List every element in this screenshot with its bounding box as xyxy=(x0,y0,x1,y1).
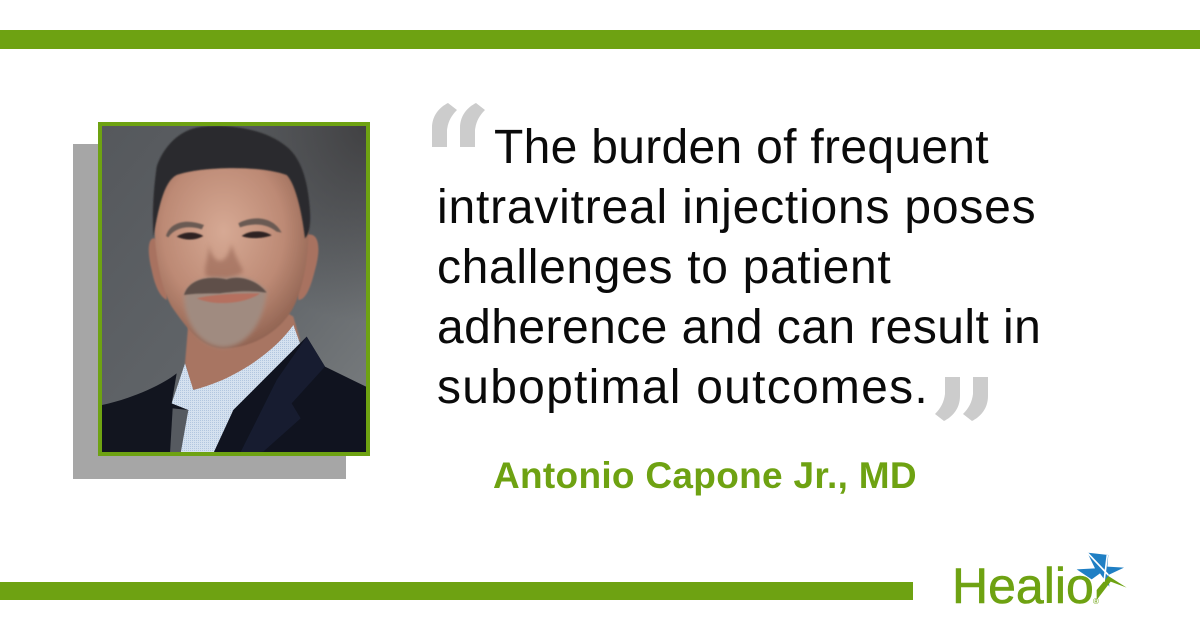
shirt xyxy=(172,325,300,453)
moustache and goatee xyxy=(184,277,267,347)
quote text: challenges to patient xyxy=(437,241,891,294)
portrait photo with green frame xyxy=(98,122,370,456)
closing quotation mark xyxy=(935,377,988,421)
ears xyxy=(149,238,170,300)
quote text: The burden of frequent xyxy=(494,121,989,174)
lips xyxy=(197,293,260,303)
eyebrows xyxy=(166,222,204,237)
bottom green bar xyxy=(0,582,913,600)
top green bar xyxy=(0,30,1200,49)
lapel highlight xyxy=(240,337,325,453)
eyes xyxy=(177,232,203,240)
Healio logo: ® xyxy=(1093,597,1099,606)
neck xyxy=(185,297,300,390)
opening quotation mark xyxy=(432,103,485,147)
hair xyxy=(153,126,310,238)
jacket right xyxy=(213,337,366,453)
face xyxy=(154,160,308,348)
jacket left xyxy=(102,373,188,453)
studio background xyxy=(102,126,366,453)
quote text: suboptimal outcomes. xyxy=(437,361,929,414)
quote text: intravitreal injections poses xyxy=(437,181,1036,234)
dark undershirt fold xyxy=(170,408,188,453)
grey offset panel behind photo xyxy=(73,144,346,479)
quote text: adherence and can result in xyxy=(437,301,1041,354)
attribution name: Antonio Capone Jr., MD xyxy=(493,455,917,496)
nose shading xyxy=(205,243,243,279)
